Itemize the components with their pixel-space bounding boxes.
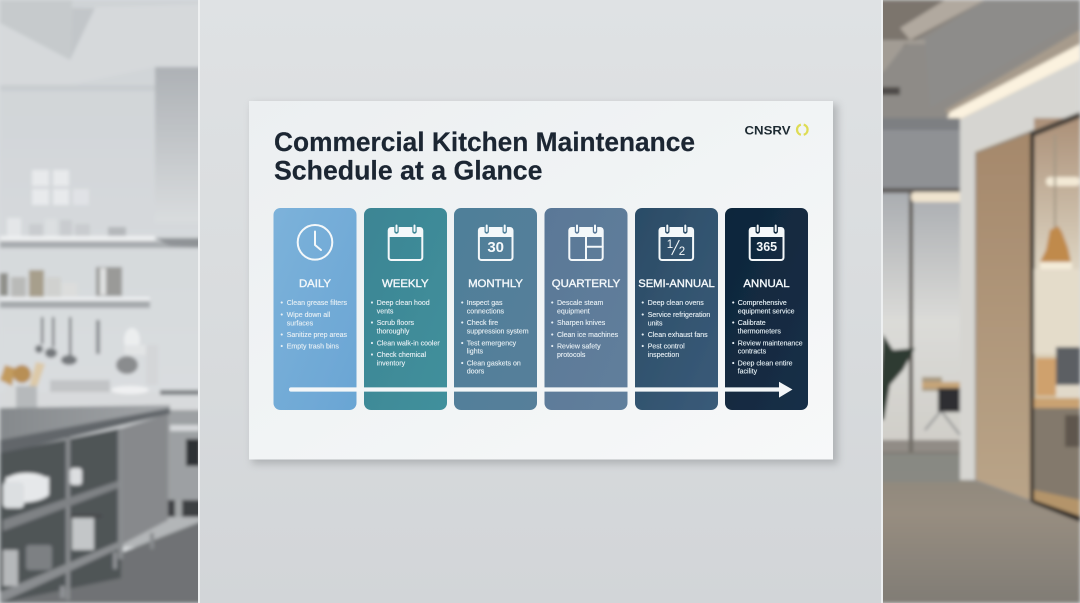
- task list: semi-annual: Service refrigeration: [648, 312, 710, 319]
- task list: weekly: •: [371, 320, 374, 327]
- task list: monthly: suppression system: [467, 329, 529, 336]
- panel: annual: [725, 208, 808, 410]
- task list: daily: •: [280, 312, 284, 319]
- icon: blank calendar: [389, 226, 422, 260]
- task list: annual: Review maintenance: [738, 340, 803, 347]
- task list: annual: Comprehensive: [738, 300, 787, 307]
- heading: quarterly: QUARTERLY: [552, 278, 621, 290]
- task list: monthly: Inspect gas: [467, 300, 503, 307]
- task list: annual: Deep clean entire: [738, 360, 793, 367]
- task list: weekly: Clean walk-in cooler: [377, 340, 440, 347]
- title: [274, 127, 695, 186]
- task list: weekly: •: [371, 352, 374, 359]
- task list: semi-annual: •: [642, 300, 644, 307]
- poster shadow: [252, 104, 838, 464]
- task list: daily: •: [280, 300, 284, 307]
- task list: annual: [732, 300, 803, 376]
- task list: annual: equipment service: [738, 308, 795, 315]
- task list: weekly: Scrub floors: [377, 320, 415, 327]
- icon: calendar 365: [750, 226, 784, 260]
- task list: monthly: Clean gaskets on: [467, 360, 521, 367]
- icon number: one half: 1: [667, 239, 673, 251]
- task list: weekly: thoroughly: [377, 329, 410, 336]
- panel: monthly: [454, 208, 537, 410]
- task list: quarterly: •: [551, 344, 554, 351]
- task list: semi-annual: •: [642, 312, 644, 319]
- task list: monthly: connections: [467, 308, 505, 315]
- task list: annual: thermometers: [738, 329, 781, 336]
- task list: semi-annual: Clean exhaust fans: [648, 332, 708, 339]
- heading: monthly: MONTHLY: [468, 278, 523, 290]
- icon: calendar 30: [479, 226, 512, 260]
- task list: daily: [280, 300, 348, 351]
- task list: weekly: [371, 300, 440, 368]
- task list: annual: contracts: [738, 349, 767, 356]
- heading: semi-annual: SEMI-ANNUAL: [638, 278, 715, 290]
- task list: quarterly: Descale steam: [557, 300, 603, 307]
- panel: weekly: [364, 208, 447, 410]
- logo: CNSRV: [744, 124, 808, 137]
- panel: semi-annual: [635, 208, 718, 410]
- panel: daily: [274, 208, 356, 410]
- background: blurred office: [878, 0, 1080, 603]
- task list: monthly: •: [461, 320, 464, 327]
- icon number: one half: 2: [679, 246, 685, 258]
- task list: monthly: •: [461, 360, 464, 367]
- task list: monthly: •: [461, 300, 464, 307]
- task list: annual: facility: [738, 369, 758, 376]
- task list: daily: Clean grease filters: [287, 300, 348, 307]
- task list: weekly: •: [371, 340, 374, 347]
- title: Commercial Kitchen Maintenance: [274, 127, 695, 157]
- task list: daily: surfaces: [287, 320, 314, 327]
- task list: weekly: Deep clean hood: [377, 300, 430, 307]
- task list: monthly: Check fire: [467, 320, 498, 327]
- icon: calendar one half: [660, 226, 693, 260]
- task list: semi-annual: units: [648, 320, 663, 327]
- task list: weekly: inventory: [377, 361, 406, 368]
- task list: quarterly: [551, 300, 619, 359]
- task list: quarterly: protocols: [557, 352, 586, 359]
- task list: quarterly: Clean ice machines: [557, 332, 619, 339]
- task list: daily: Sanitize prep areas: [287, 332, 348, 339]
- task list: weekly: Check chemical: [377, 352, 427, 359]
- icon number: 30: 30: [487, 239, 504, 256]
- task list: annual: •: [732, 320, 735, 327]
- icon: clock: [298, 225, 332, 260]
- task list: semi-annual: •: [642, 344, 644, 351]
- task list: daily: •: [280, 332, 284, 339]
- icon: quarter calendar: [569, 226, 603, 260]
- task list: monthly: [461, 300, 529, 376]
- task list: weekly: •: [371, 300, 374, 307]
- heading: annual: ANNUAL: [743, 278, 790, 290]
- task list: semi-annual: •: [642, 332, 644, 339]
- task list: semi-annual: Deep clean ovens: [648, 300, 704, 307]
- heading: weekly: WEEKLY: [382, 278, 429, 290]
- task list: weekly: vents: [377, 308, 394, 315]
- task list: daily: •: [280, 344, 284, 351]
- task list: quarterly: •: [551, 300, 554, 307]
- task list: quarterly: •: [551, 320, 554, 327]
- task list: semi-annual: [642, 300, 710, 359]
- task list: daily: Empty trash bins: [287, 344, 339, 351]
- background: blurred kitchen: [0, 0, 205, 603]
- logo: CNSRV: CNSRV: [744, 124, 791, 137]
- task list: quarterly: •: [551, 332, 554, 339]
- task list: semi-annual: Pest control: [648, 344, 685, 351]
- poster board: [249, 101, 833, 460]
- task list: semi-annual: inspection: [648, 352, 679, 359]
- task list: daily: Wipe down all: [287, 312, 331, 319]
- task list: annual: •: [732, 300, 735, 307]
- title: Schedule at a Glance: [274, 156, 542, 186]
- wall: [198, 0, 883, 603]
- icon number: 365: 365: [756, 240, 777, 254]
- task list: monthly: Test emergency: [467, 340, 517, 347]
- task list: annual: •: [732, 340, 735, 347]
- panel: quarterly: [544, 208, 628, 410]
- arrow: timeline: [289, 382, 792, 398]
- task list: monthly: doors: [467, 369, 485, 376]
- task list: annual: •: [732, 360, 735, 367]
- task list: monthly: •: [461, 340, 464, 347]
- task list: quarterly: equipment: [557, 308, 590, 315]
- task list: monthly: lights: [467, 349, 484, 356]
- task list: quarterly: Review safety: [557, 344, 601, 351]
- heading: daily: DAILY: [299, 278, 331, 290]
- icon number: one half: [667, 239, 685, 258]
- task list: quarterly: Sharpen knives: [557, 320, 606, 327]
- task list: annual: Calibrate: [738, 320, 766, 327]
